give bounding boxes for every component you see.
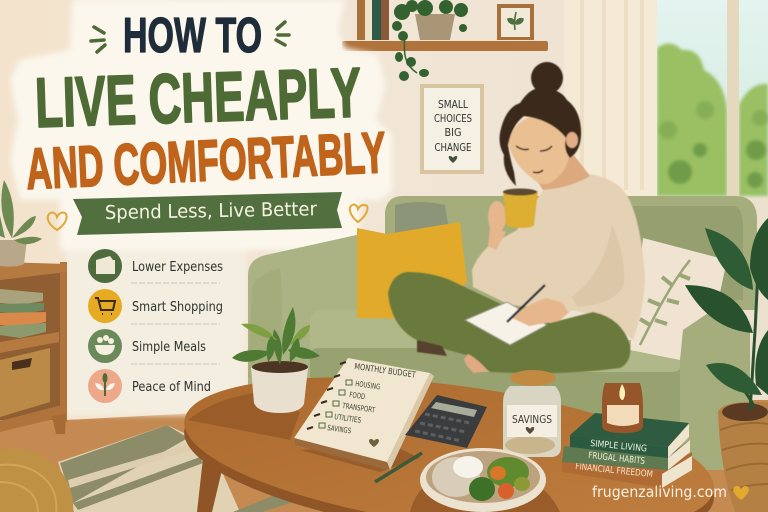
ribbon banner: spend less, live better: Spend Less, Live Better — [105, 198, 317, 224]
title: how to: HOW TO — [123, 9, 262, 63]
plant in white pot — [232, 307, 320, 413]
wicker pouf — [0, 449, 73, 512]
accent ticks left — [91, 27, 105, 52]
neck and face — [530, 150, 590, 190]
candle — [602, 383, 643, 433]
window with trees — [652, 0, 768, 196]
legs — [388, 272, 630, 373]
bowl of rice and vegetables — [420, 448, 546, 512]
hair — [500, 88, 581, 186]
frugal habits book: FRUGAL HABITS — [588, 451, 646, 467]
footer heart — [733, 486, 749, 500]
checklist items: FOOD — [349, 390, 366, 401]
simple living book: SIMPLE LIVING — [590, 439, 647, 454]
curtain — [564, 0, 654, 196]
table leg — [197, 458, 222, 512]
rug — [58, 425, 300, 512]
checklist items: SAVINGS — [327, 423, 352, 435]
jar label: SAVINGS — [512, 413, 552, 426]
accent ticks right — [276, 22, 289, 45]
calculator — [405, 395, 487, 448]
table shadows — [188, 392, 560, 512]
stacked books — [0, 289, 46, 338]
item: lower expenses: Lower Expenses — [132, 260, 223, 275]
large plant in wicker basket — [685, 218, 768, 512]
yellow mug — [503, 191, 538, 228]
wall poster: small choices big change: CHOICES — [434, 112, 472, 125]
item: peace of mind: Peace of Mind — [132, 380, 211, 395]
wall poster: small choices big change: SMALL — [438, 98, 469, 111]
checklist items: UTILITIES — [334, 412, 362, 425]
closed eyes and smile — [516, 146, 552, 173]
wicker basket — [0, 348, 50, 417]
savings jar — [503, 370, 561, 457]
wall poster: small choices big change — [420, 84, 484, 174]
wall shelf with books and plant — [342, 0, 548, 81]
item: simple meals: Simple Meals — [132, 340, 206, 355]
potted plant on bookcase — [0, 180, 42, 267]
pen — [507, 285, 545, 322]
left bookcase — [0, 262, 67, 434]
brush panel behind title — [10, 0, 392, 415]
benefit list — [88, 249, 223, 403]
notebook title: MONTHLY BUDGET — [354, 362, 417, 381]
yellow pillow — [357, 222, 467, 319]
item: peace of mind — [88, 369, 211, 403]
title: and comfortably: AND COMFORTABLY — [25, 120, 387, 202]
notebook — [465, 302, 547, 345]
title: how to — [91, 9, 262, 63]
item: simple meals — [88, 329, 206, 363]
wall poster: small choices big change: BIG — [444, 126, 462, 139]
item: smart shopping: Smart Shopping — [132, 300, 223, 315]
title: live cheaply: LIVE CHEAPLY — [34, 53, 362, 142]
item: lower expenses — [88, 249, 223, 283]
website footer: frugenzaliving.com — [592, 483, 727, 501]
financial freedom book: FINANCIAL FREEDOM — [575, 462, 653, 480]
checklist items: TRANSPORT — [341, 401, 376, 415]
ribbon banner: spend less, live better — [73, 192, 342, 235]
coffee table — [184, 377, 714, 512]
wall poster: small choices big change: CHANGE — [434, 141, 472, 154]
left hand — [488, 201, 506, 233]
table edge — [184, 387, 714, 512]
woman writing and sipping coffee — [388, 62, 645, 373]
writing hand — [512, 298, 573, 326]
table top — [184, 377, 714, 512]
checklist items — [327, 379, 381, 435]
item: smart shopping — [88, 289, 223, 323]
sofa — [248, 196, 757, 470]
sweater — [472, 174, 645, 340]
framed leaf picture — [497, 4, 534, 40]
pencil — [375, 453, 422, 482]
heart right — [350, 205, 368, 222]
stack of books — [562, 413, 692, 488]
monthly budget notebook — [294, 358, 434, 470]
checklist items: HOUSING — [355, 379, 381, 391]
patterned cream pillow — [630, 238, 727, 360]
heart left — [48, 213, 67, 230]
